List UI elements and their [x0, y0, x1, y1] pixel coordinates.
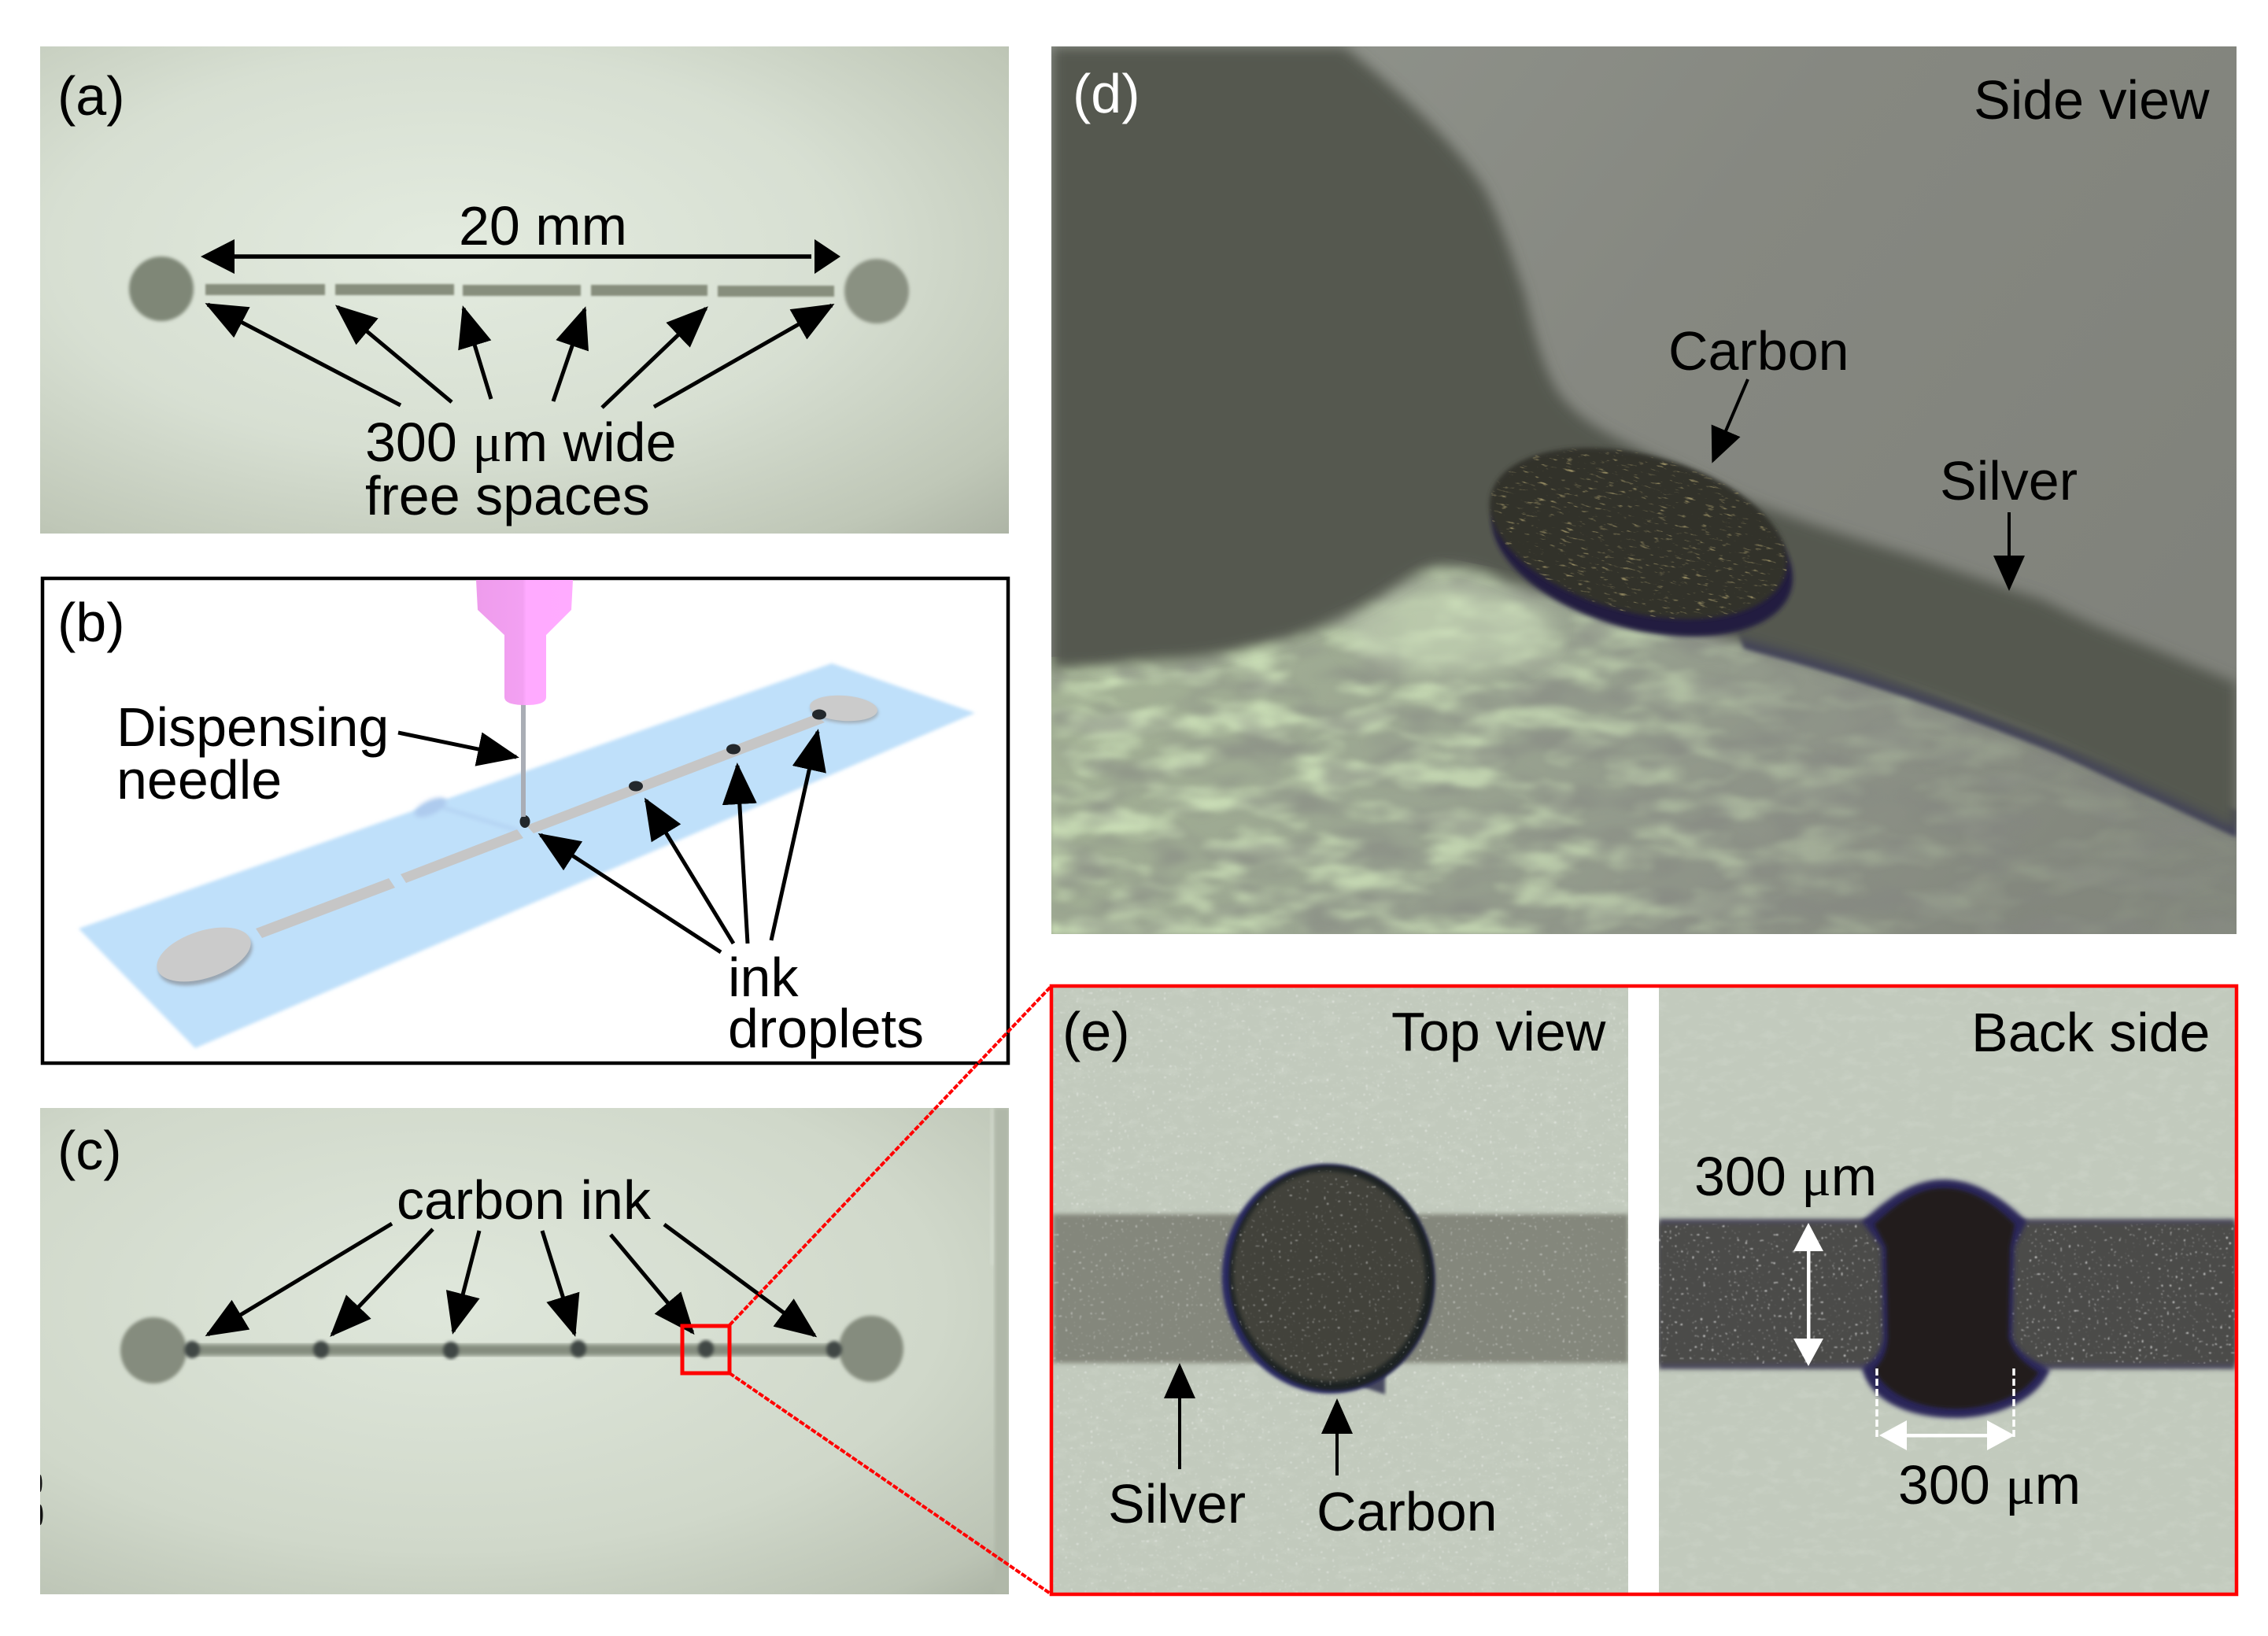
dispensing needle steel	[521, 702, 526, 817]
arrow: vertical white dimension	[1793, 1223, 1823, 1366]
label: 20 mm: 20 mm	[459, 195, 627, 257]
label: ink droplets	[728, 947, 924, 1059]
needle shadow on sheet	[412, 794, 519, 831]
arrow: horizontal white dimension	[1879, 1420, 2015, 1450]
label: (c): (c)	[57, 1120, 122, 1181]
silver pads	[120, 1316, 903, 1383]
purple fringe under silver	[1731, 614, 2237, 837]
silver track segments	[256, 715, 825, 938]
label: 300 um wide free spaces	[365, 412, 677, 526]
label: 300 um wide free spaces: 300 μm wide	[365, 412, 677, 474]
arrow: to carbon	[1713, 379, 1748, 460]
right pad	[809, 693, 879, 726]
silver line segments separated by gaps	[205, 284, 834, 297]
dispensing needle pink hub	[476, 580, 573, 705]
label: (e): (e)	[1062, 1001, 1130, 1062]
dark silver pad and track	[1051, 46, 2237, 831]
left edge marks	[40, 1475, 42, 1525]
panel: (a) free spaces photo	[40, 46, 1009, 534]
silver line	[192, 1344, 834, 1356]
label: Carbon: Carbon	[1317, 1481, 1498, 1542]
white divider between views	[1628, 988, 1659, 1593]
panel: (d) side view photo	[1051, 46, 2237, 934]
label: Dispensing needle: Dispensing	[116, 696, 389, 758]
label: Silver: Silver	[1108, 1473, 1246, 1534]
label: Side view: Side view	[1974, 69, 2210, 131]
ink droplets	[519, 710, 826, 828]
red frame	[1051, 986, 2237, 1594]
red selection box	[682, 1326, 730, 1373]
arrow: to carbon	[1335, 1401, 1339, 1475]
right silver pad	[844, 259, 909, 323]
arrow: 20 mm double arrow	[201, 239, 840, 274]
label: 300 um gap width: 300 μm	[1898, 1454, 2081, 1516]
lower lit substrate	[1051, 551, 2237, 934]
carbon droplet top surface	[1443, 391, 1837, 688]
label: 300 um track width: 300 μm	[1694, 1146, 1877, 1208]
label: (d): (d)	[1073, 63, 1140, 124]
arrow: to silver	[1178, 1366, 1181, 1469]
label: Back side: Back side	[1971, 1002, 2210, 1063]
left silver pad	[129, 257, 194, 321]
label: ink droplets: ink	[728, 947, 799, 1008]
label: Silver: Silver	[1940, 450, 2078, 511]
label: (a): (a)	[57, 65, 125, 127]
carbon droplet rim	[1472, 432, 1812, 667]
blue substrate sheet	[79, 663, 975, 1048]
silver track	[1053, 1214, 1628, 1363]
label: Carbon: Carbon	[1668, 320, 1849, 382]
arrow: to needle	[398, 733, 516, 757]
label: Dispensing needle: needle	[116, 749, 282, 811]
silver track back	[1659, 1219, 2235, 1369]
panel: (e) top view photo	[1053, 988, 1628, 1593]
right edge band	[992, 1108, 1009, 1553]
label: 300 um wide free spaces: free spaces	[365, 465, 650, 526]
label: carbon ink: carbon ink	[397, 1169, 652, 1231]
panel: (c) carbon ink photo	[38, 1108, 1009, 1594]
panel: (e) back side photo	[1659, 988, 2235, 1593]
label: (b): (b)	[57, 592, 125, 653]
label: ink droplets: droplets	[728, 998, 924, 1059]
dashed white guides	[1877, 1368, 2014, 1439]
left pad	[150, 917, 259, 996]
carbon plug	[1862, 1180, 2050, 1418]
carbon droplet	[1210, 1154, 1446, 1404]
label: Top view: Top view	[1391, 1001, 1606, 1062]
arrows: free spaces	[208, 305, 832, 408]
panel: (b) dispensing schematic	[42, 578, 1008, 1063]
arrow: to silver	[2008, 512, 2011, 588]
label: Dispensing needle	[116, 696, 389, 811]
arrows: carbon ink	[208, 1224, 814, 1335]
red zoom lines	[730, 986, 1051, 1594]
arrows: ink droplets	[541, 732, 818, 952]
carbon dots	[184, 1340, 842, 1359]
